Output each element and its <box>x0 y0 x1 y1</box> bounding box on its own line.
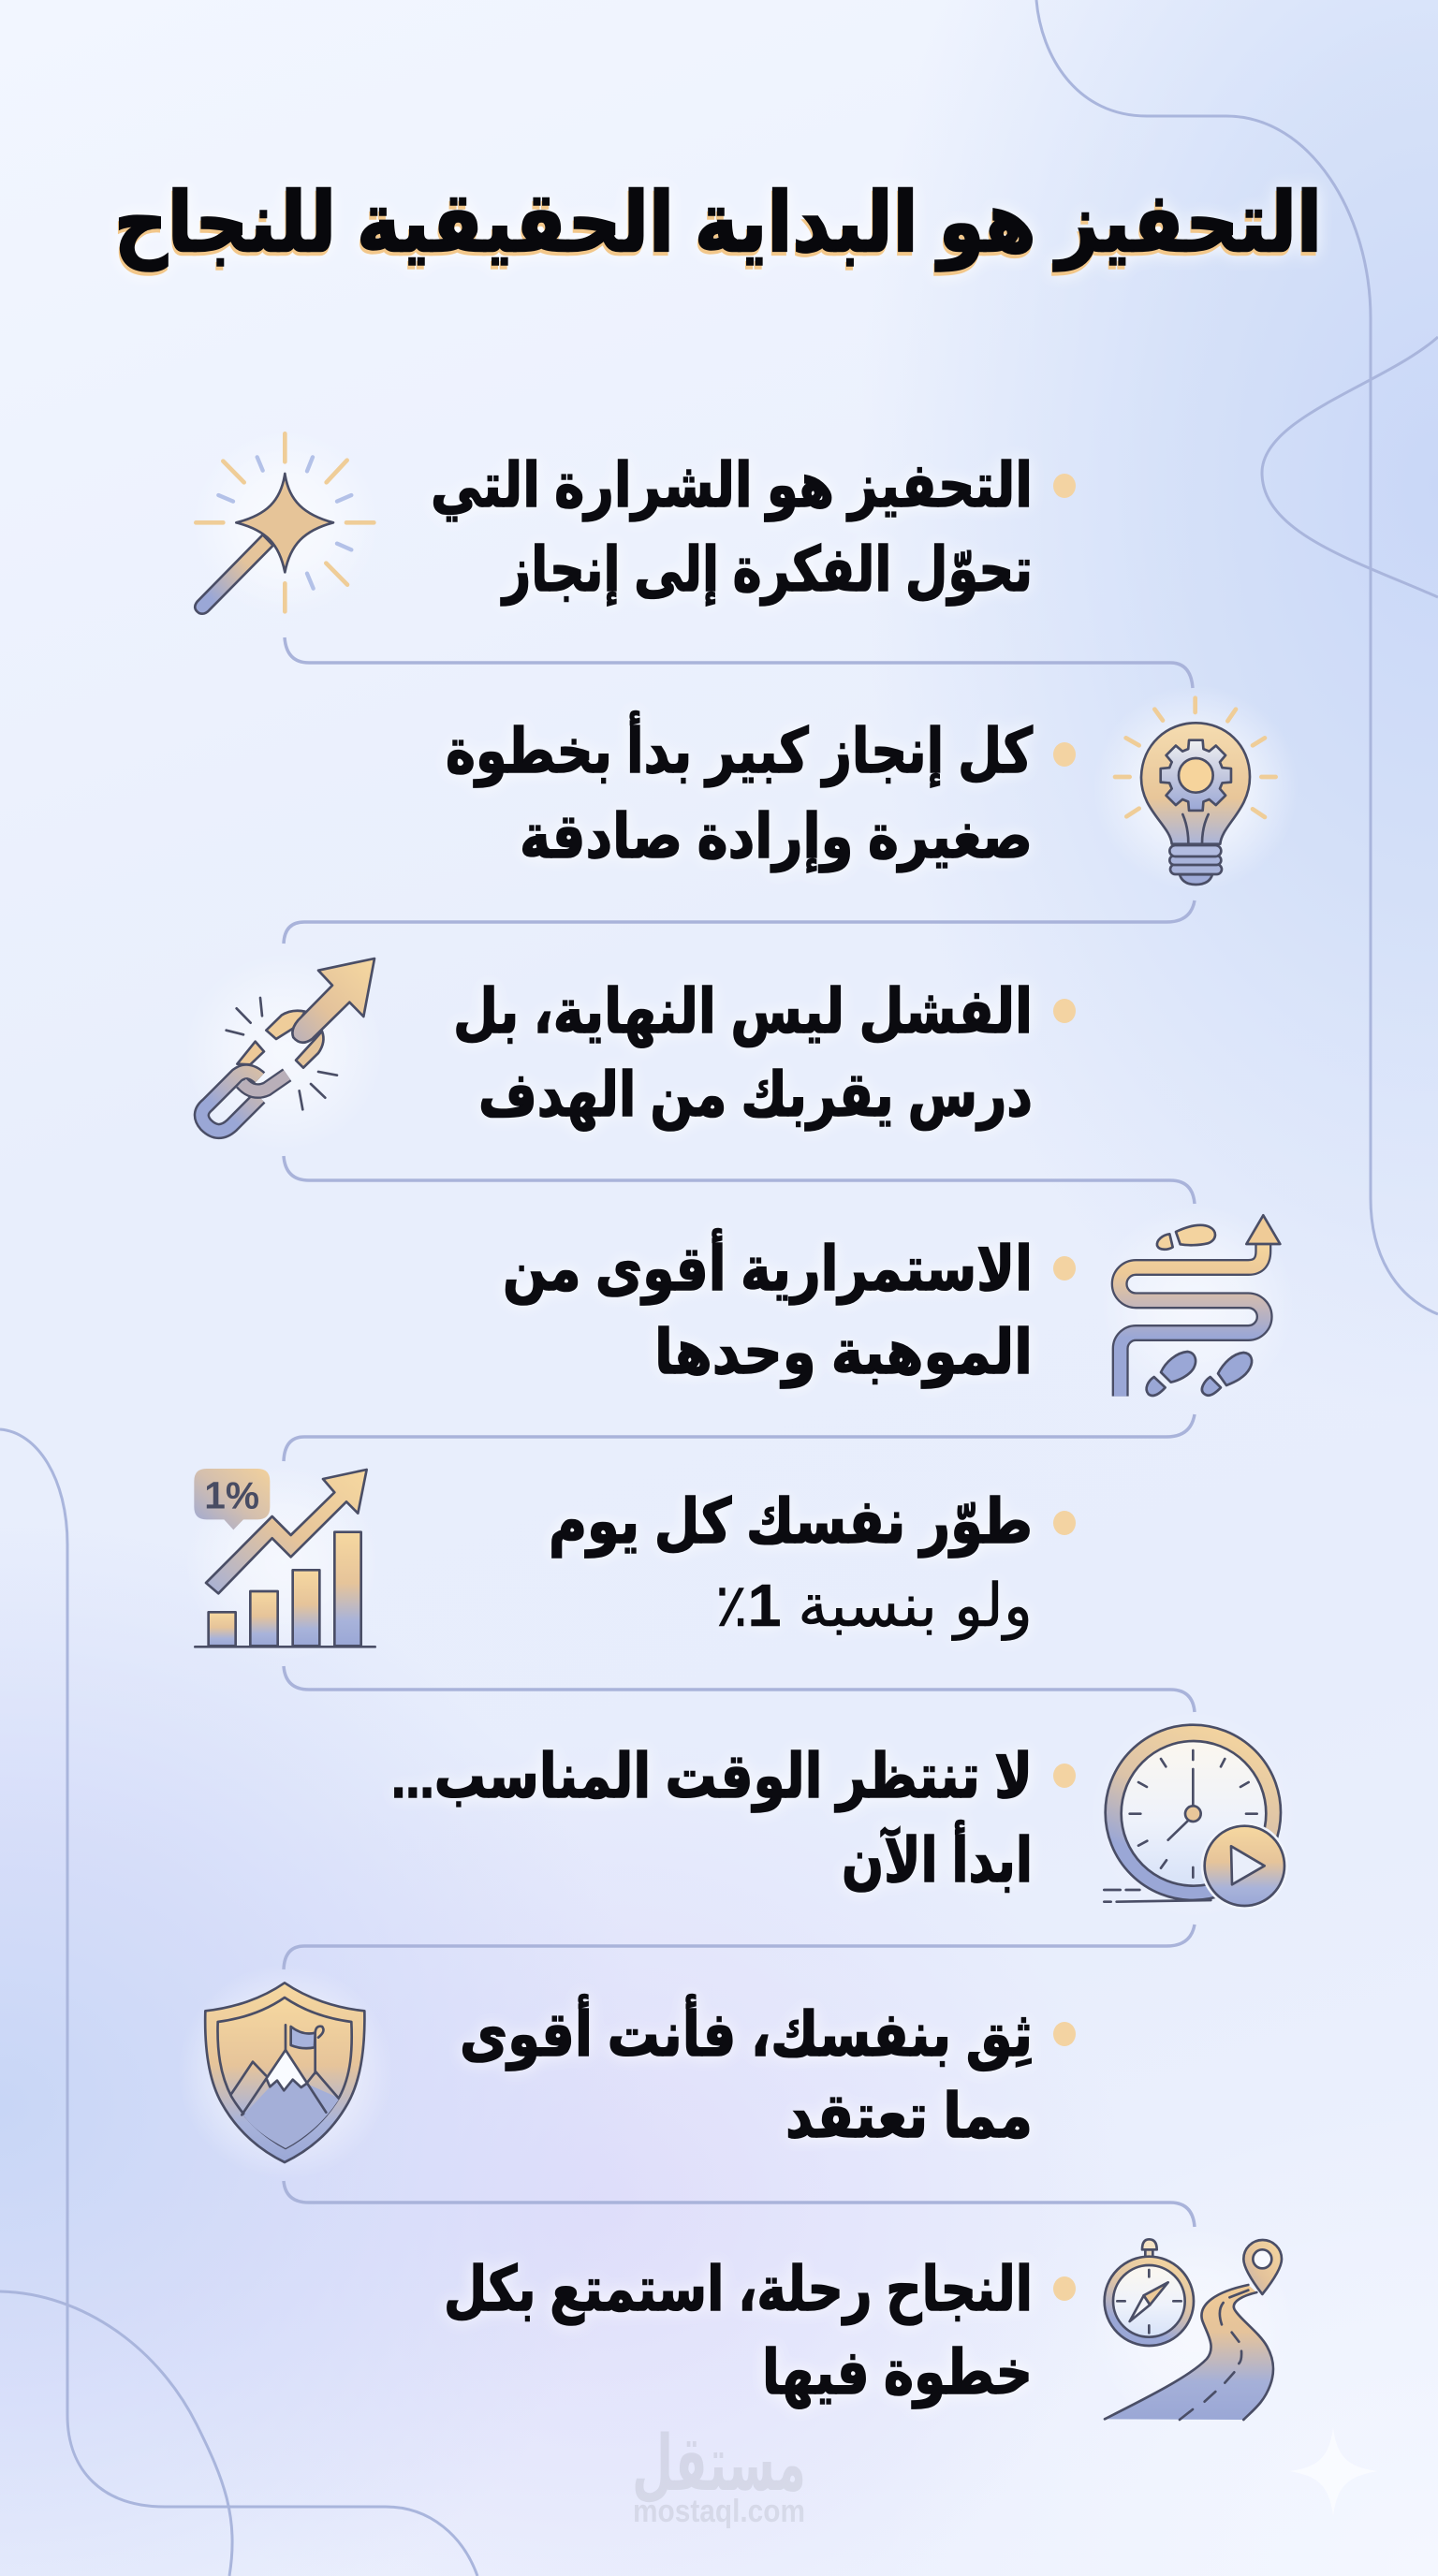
bullet <box>1053 1511 1076 1535</box>
icon: winding path and footprints <box>1095 1205 1295 1404</box>
text: item 3 <box>453 976 1033 1132</box>
text: item 8: النجاح رحلة، استمتع بكل <box>444 2254 1033 2325</box>
text: item 1: تحوّل الفكرة إلى إنجاز <box>501 534 1033 607</box>
icon: broken chain with arrow <box>184 952 384 1151</box>
item 3 <box>184 952 1076 1151</box>
connector lines between items <box>284 637 1195 2227</box>
bullet <box>1053 2022 1076 2046</box>
text: item 2: كل إنجاز كبير بدأ بخطوة <box>446 710 1033 788</box>
item 7 <box>178 1964 1076 2179</box>
text: item 2 <box>446 710 1033 873</box>
item 6 <box>391 1710 1299 1919</box>
icon: clock with play button <box>1089 1710 1299 1919</box>
icon: compass and road <box>1091 2226 1297 2432</box>
text: item 4 <box>503 1228 1033 1389</box>
text: item 6: لا تنتظر الوقت المناسب... <box>391 1741 1033 1813</box>
text: item 8 <box>444 2254 1033 2409</box>
bullet <box>1053 999 1076 1023</box>
title: التحفيز هو البداية الحقيقية للنجاح <box>114 176 1322 271</box>
decorative sparkle <box>1289 2427 1378 2516</box>
bullet <box>1053 2276 1076 2301</box>
text: item 7: مما تعتقد <box>785 2081 1033 2150</box>
text: item 4: الموهبة وحدها <box>654 1317 1033 1389</box>
text: item 5 <box>549 1486 1033 1641</box>
speech bubble 1%: 1% <box>204 1474 259 1517</box>
text: item 7 <box>460 1994 1033 2150</box>
item 8 <box>444 2226 1297 2432</box>
text: item 6 <box>391 1741 1033 1895</box>
icon: light bulb with gear <box>1093 685 1299 891</box>
icon: growth chart with 1% bubble <box>184 1462 384 1661</box>
text: item 5: طوّر نفسك كل يوم <box>549 1486 1033 1559</box>
bullet <box>1053 1764 1076 1788</box>
watermark <box>632 2422 806 2529</box>
text: item 7: ثِق بنفسك، فأنت أقوى <box>460 1994 1033 2071</box>
text: item 5: ولو بنسبة 1٪ <box>715 1572 1033 1641</box>
text: item 1 <box>431 450 1033 607</box>
text: item 3: درس يقربك من الهدف <box>478 1060 1033 1132</box>
watermark: mostaql.com <box>633 2494 805 2529</box>
item 2 <box>446 685 1299 891</box>
icon: shield with mountain and flag <box>178 1964 393 2179</box>
text: item 1: التحفيز هو الشرارة التي <box>431 450 1033 522</box>
bullet <box>1053 742 1076 767</box>
text: item 6: ابدأ الآن <box>842 1820 1033 1895</box>
item 4 <box>503 1205 1295 1404</box>
bullet <box>1053 474 1076 498</box>
watermark: مستقل <box>632 2422 806 2507</box>
icon: magic wand <box>192 429 379 616</box>
bullet <box>1053 1256 1076 1281</box>
speech bubble 1% <box>194 1469 270 1530</box>
text: item 2: صغيرة وإرادة صادقة <box>520 801 1033 873</box>
text: item 3: الفشل ليس النهاية، بل <box>453 976 1033 1048</box>
item 1 <box>192 429 1076 616</box>
text: item 4: الاستمرارية أقوى من <box>503 1228 1033 1306</box>
text: item 8: خطوة فيها <box>762 2337 1033 2409</box>
item 5 <box>184 1462 1076 1661</box>
